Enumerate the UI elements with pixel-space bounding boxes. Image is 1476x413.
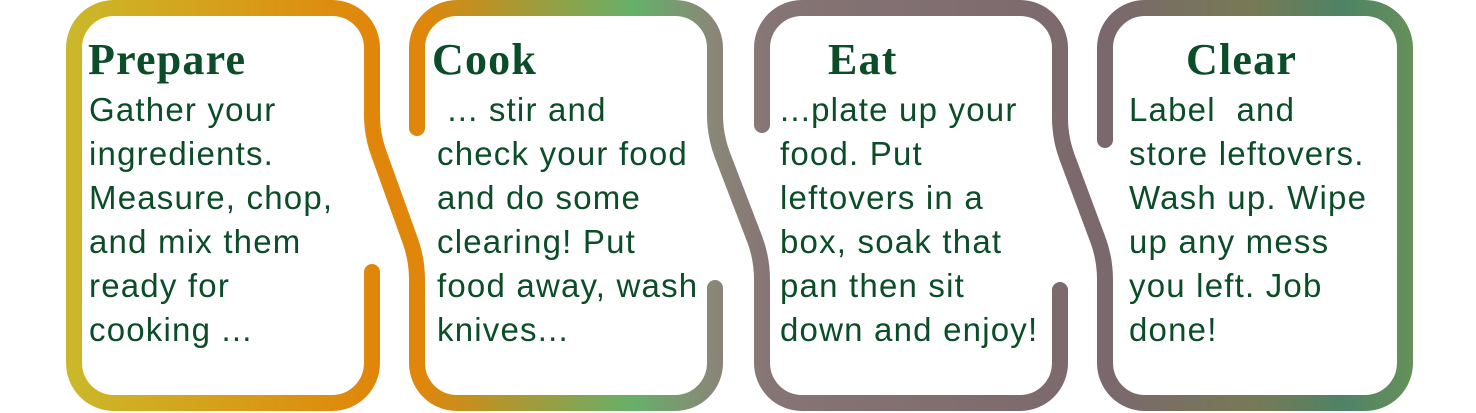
text: clear: Label and: [1129, 91, 1295, 128]
text: eat: down and enjoy!: [780, 311, 1038, 348]
text: cook: clearing! Put: [437, 223, 636, 260]
text: prepare: cooking ...: [89, 311, 253, 348]
text: cook: check your food: [437, 135, 688, 172]
heading: Cook: Cook: [432, 35, 537, 84]
text: prepare: Measure, chop,: [89, 179, 333, 216]
panel: eat: [780, 35, 1038, 348]
text: clear: up any mess: [1129, 223, 1329, 260]
text: cook: and do some: [437, 179, 641, 216]
text: eat: leftovers in a: [780, 179, 984, 216]
heading: Prepare: Prepare: [88, 35, 246, 84]
text: eat: [780, 91, 1038, 348]
panel: prepare: [88, 35, 333, 348]
text: clear: done!: [1129, 311, 1218, 348]
text: cook: knives...: [437, 311, 569, 348]
text: cook: food away, wash: [437, 267, 698, 304]
text: clear: store leftovers.: [1129, 135, 1365, 172]
heading: Eat: Eat: [828, 35, 898, 84]
text: prepare: and mix them: [89, 223, 301, 260]
heading: Clear: Clear: [1186, 35, 1297, 84]
panel: cook: [432, 35, 698, 348]
text: prepare: ingredients.: [89, 135, 274, 172]
text: eat: pan then sit: [780, 267, 965, 304]
text: clear: [1129, 91, 1367, 348]
text: prepare: ready for: [89, 267, 230, 304]
text: eat: ...plate up your: [780, 91, 1018, 128]
text: clear: Wash up. Wipe: [1129, 179, 1367, 216]
panel: clear: [1129, 35, 1367, 348]
text: eat: food. Put: [780, 135, 923, 172]
text: prepare: Gather your: [89, 91, 276, 128]
text: cook: [437, 91, 698, 348]
text: cook: ... stir and: [447, 91, 607, 128]
text: clear: you left. Job: [1129, 267, 1323, 304]
text: eat: box, soak that: [780, 223, 1002, 260]
text: prepare: [89, 91, 333, 348]
